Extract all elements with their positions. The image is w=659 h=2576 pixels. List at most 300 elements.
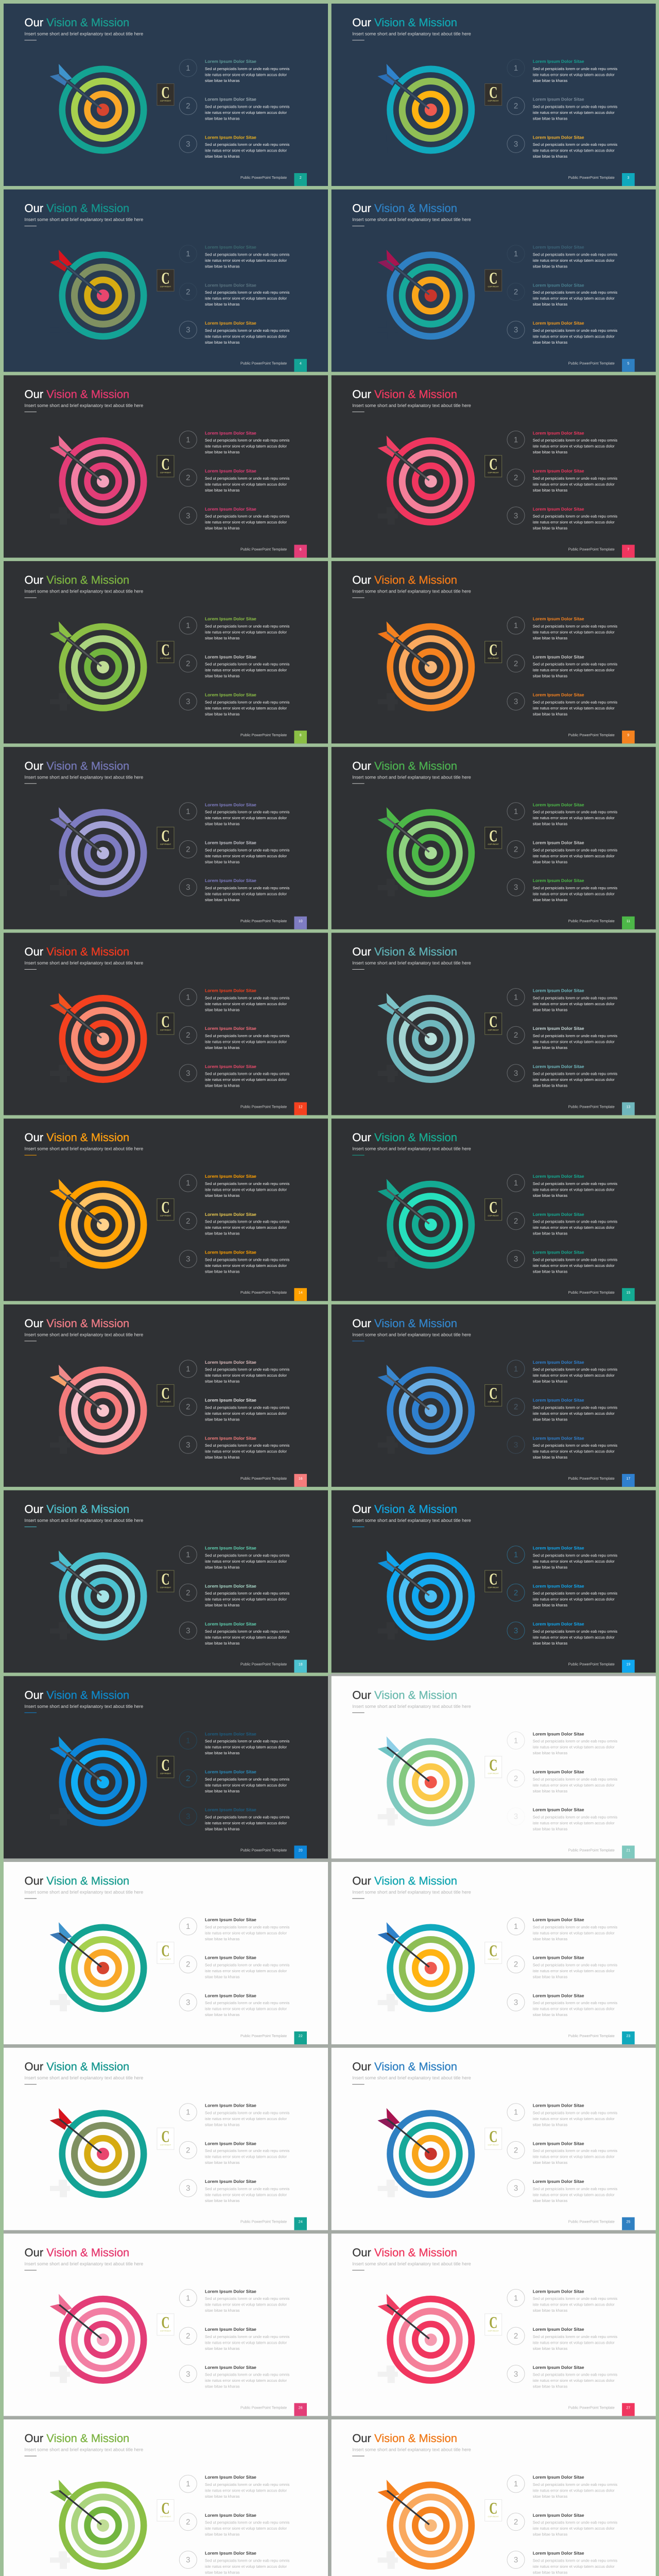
item 2: Lorem Ipsum Dolor Sitae (205, 1398, 256, 1403)
badge: COPYRIGHT (160, 1029, 171, 1031)
badge: C (161, 1755, 170, 1774)
item 1: Sed ut perspiciatis lorem or unde eab repu omnis (533, 2296, 617, 2301)
item 2: iste natus error siore et volup tatem accus dolor (205, 2155, 287, 2159)
item 1: Sed ut perspiciatis lorem or unde eab repu omnis (533, 2482, 617, 2487)
item 1: 1 (186, 807, 190, 816)
title: Our Vision & Mission (25, 2432, 129, 2445)
item 2: Lorem Ipsum Dolor Sitae (533, 468, 584, 473)
item 1: Sed ut perspiciatis lorem or unde eab repu omnis (533, 995, 617, 1000)
item 2: Lorem Ipsum Dolor Sitae (205, 282, 256, 287)
item 3: 3 (514, 883, 518, 892)
slide 12: dark pale teal (332, 933, 656, 1115)
item 2: iste natus error siore et volup tatem accus dolor (205, 296, 287, 301)
subtitle: Insert some short and brief explanatory text about title here (25, 2261, 143, 2266)
item 2: iste natus error siore et volup tatem accus dolor (533, 2155, 615, 2159)
item 1: 1 (186, 2294, 190, 2302)
badge: COPYRIGHT (160, 100, 171, 102)
item 3 (507, 2550, 617, 2574)
target with arrow (50, 1179, 144, 1268)
footer: Public PowerPoint Template (240, 2405, 287, 2410)
badge: C (161, 269, 170, 287)
item 2: Sed ut perspiciatis lorem or unde eab repu omnis (205, 1963, 289, 1967)
footer (568, 359, 635, 372)
item 2 (179, 2141, 290, 2165)
target with arrow (377, 621, 472, 710)
footer: 8 (300, 734, 302, 737)
item 3: Lorem Ipsum Dolor Sitae (205, 692, 256, 697)
title: Our Vision & Mission (352, 1131, 457, 1144)
item 2: sitae bitae ta kharas (205, 1231, 240, 1236)
item 3: Sed ut perspiciatis lorem or unde eab repu omnis (205, 1257, 289, 1262)
item 1 (507, 430, 617, 454)
item 3: Sed ut perspiciatis lorem or unde eab repu omnis (205, 1443, 289, 1448)
item 3: 3 (186, 1255, 190, 1264)
item 2: Lorem Ipsum Dolor Sitae (205, 97, 256, 102)
item 2: iste natus error siore et volup tatem accus dolor (205, 2526, 287, 2531)
footer: Public PowerPoint Template (568, 1290, 615, 1295)
footer: 10 (299, 920, 303, 923)
badge (157, 640, 174, 663)
target with arrow (377, 1922, 472, 2011)
item 3: sitae bitae ta kharas (533, 1269, 567, 1274)
item 2: Sed ut perspiciatis lorem or unde eab repu omnis (533, 848, 617, 852)
item 1: iste natus error siore et volup tatem accus dolor (533, 1373, 615, 1378)
item 3: Lorem Ipsum Dolor Sitae (205, 1435, 256, 1440)
item 2 (179, 840, 290, 864)
item 1: Sed ut perspiciatis lorem or unde eab repu omnis (205, 1553, 289, 1557)
item 1: Lorem Ipsum Dolor Sitae (533, 2289, 584, 2294)
item 1: 1 (186, 1551, 190, 1560)
item 2: sitae bitae ta kharas (533, 1417, 567, 1421)
item 2: Lorem Ipsum Dolor Sitae (205, 2513, 256, 2518)
title: Our Vision & Mission (25, 16, 129, 29)
item 3: sitae bitae ta kharas (533, 1641, 567, 1646)
item 3: iste natus error siore et volup tatem accus dolor (533, 1449, 615, 1454)
item 3: sitae bitae ta kharas (533, 2012, 567, 2017)
item 3: Sed ut perspiciatis lorem or unde eab repu omnis (533, 2001, 617, 2005)
item 2: iste natus error siore et volup tatem accus dolor (205, 668, 287, 672)
footer (240, 1103, 307, 1115)
target with arrow (377, 1551, 472, 1640)
item 3: iste natus error siore et volup tatem accus dolor (205, 1635, 287, 1639)
item 2: Sed ut perspiciatis lorem or unde eab repu omnis (533, 1219, 617, 1224)
item 2: 2 (186, 102, 190, 111)
badge: C (489, 1384, 497, 1402)
subtitle: Insert some short and brief explanatory text about title here (352, 2261, 471, 2266)
item 1: Sed ut perspiciatis lorem or unde eab repu omnis (205, 1181, 289, 1186)
title: Our Vision & Mission (352, 387, 457, 400)
item 1: Lorem Ipsum Dolor Sitae (205, 616, 256, 621)
item 1: iste natus error siore et volup tatem accus dolor (533, 72, 615, 77)
slide 28: light orange (332, 2419, 656, 2576)
footer: 11 (627, 920, 630, 923)
item 1: 1 (514, 435, 518, 444)
badge: C (489, 826, 497, 845)
item 1: sitae bitae ta kharas (205, 636, 240, 640)
item 3: iste natus error siore et volup tatem accus dolor (205, 148, 287, 153)
item 3: 3 (186, 140, 190, 148)
badge: C (161, 826, 170, 845)
footer (568, 1845, 635, 1858)
item 3: Lorem Ipsum Dolor Sitae (205, 878, 256, 883)
item 3: Lorem Ipsum Dolor Sitae (205, 1993, 256, 1998)
item 3: Sed ut perspiciatis lorem or unde eab repu omnis (205, 2001, 289, 2005)
item 2: iste natus error siore et volup tatem accus dolor (533, 668, 615, 672)
item 2: Lorem Ipsum Dolor Sitae (205, 1583, 256, 1588)
badge: C (489, 1198, 497, 1216)
item 3: Lorem Ipsum Dolor Sitae (533, 506, 584, 512)
target with arrow (50, 2108, 144, 2197)
item 3: sitae bitae ta kharas (205, 2198, 240, 2203)
item 1: sitae bitae ta kharas (533, 636, 567, 640)
badge (157, 269, 174, 291)
target with arrow (50, 250, 144, 339)
item 2: iste natus error siore et volup tatem accus dolor (533, 296, 615, 301)
item 2 (507, 1398, 617, 1421)
item 2 (179, 1955, 290, 1979)
item 1: Lorem Ipsum Dolor Sitae (533, 616, 584, 621)
item 1: iste natus error siore et volup tatem accus dolor (533, 1187, 615, 1192)
item 2: Sed ut perspiciatis lorem or unde eab repu omnis (533, 104, 617, 109)
footer: 17 (627, 1477, 630, 1481)
badge: COPYRIGHT (488, 2144, 499, 2146)
item 2: 2 (514, 287, 518, 296)
item 2: sitae bitae ta kharas (533, 674, 567, 679)
item 1 (507, 1360, 617, 1384)
badge: COPYRIGHT (488, 286, 499, 288)
item 3: Sed ut perspiciatis lorem or unde eab repu omnis (533, 886, 617, 890)
item 2: iste natus error siore et volup tatem accus dolor (533, 1783, 615, 1787)
item 1: iste natus error siore et volup tatem accus dolor (533, 444, 615, 449)
slide 15: dark light pink (4, 1304, 328, 1487)
item 2: 2 (186, 659, 190, 668)
subtitle: Insert some short and brief explanatory text about title here (25, 1890, 143, 1895)
item 3: 3 (186, 2184, 190, 2193)
item 3: sitae bitae ta kharas (205, 1455, 240, 1460)
item 2 (507, 1026, 617, 1050)
badge: C (161, 640, 170, 659)
item 3 (507, 1250, 617, 1274)
item 1: Sed ut perspiciatis lorem or unde eab repu omnis (533, 2110, 617, 2115)
item 1: 1 (514, 1179, 518, 1188)
item 1 (179, 2103, 290, 2127)
footer (568, 1288, 635, 1301)
item 3: Lorem Ipsum Dolor Sitae (533, 2551, 584, 2556)
item 1: 1 (514, 1922, 518, 1931)
item 1: 1 (514, 1736, 518, 1745)
item 1: sitae bitae ta kharas (533, 450, 567, 454)
target with arrow (50, 1922, 144, 2011)
footer (568, 2031, 635, 2044)
badge (485, 83, 502, 105)
item 2: iste natus error siore et volup tatem accus dolor (533, 2526, 615, 2531)
item 2 (179, 1583, 290, 1607)
item 2: 2 (514, 102, 518, 111)
item 1: Lorem Ipsum Dolor Sitae (205, 1174, 256, 1179)
item 2: 2 (186, 845, 190, 854)
item 2 (179, 282, 290, 307)
title rule (352, 783, 365, 784)
item 3: Lorem Ipsum Dolor Sitae (205, 320, 256, 326)
item 1: 1 (514, 2108, 518, 2117)
item 1: Sed ut perspiciatis lorem or unde eab repu omnis (533, 252, 617, 257)
item 2: Lorem Ipsum Dolor Sitae (205, 1212, 256, 1217)
item 1: sitae bitae ta kharas (533, 1937, 567, 1941)
badge: C (489, 640, 497, 659)
item 2: Lorem Ipsum Dolor Sitae (533, 1398, 584, 1403)
footer: 26 (299, 2406, 303, 2410)
footer (240, 545, 307, 557)
item 2: sitae bitae ta kharas (533, 1603, 567, 1607)
item 3: iste natus error siore et volup tatem accus dolor (533, 1635, 615, 1639)
footer: 18 (299, 1663, 303, 1667)
slide 4: navy blue magenta arrow (332, 190, 656, 372)
item 1: Lorem Ipsum Dolor Sitae (205, 2103, 256, 2108)
item 3: Sed ut perspiciatis lorem or unde eab repu omnis (205, 2187, 289, 2191)
item 2: Lorem Ipsum Dolor Sitae (205, 840, 256, 845)
item 3: Sed ut perspiciatis lorem or unde eab repu omnis (205, 700, 289, 704)
item 2: iste natus error siore et volup tatem accus dolor (205, 854, 287, 858)
item 3: Sed ut perspiciatis lorem or unde eab repu omnis (205, 514, 289, 519)
item 3: iste natus error siore et volup tatem accus dolor (205, 334, 287, 338)
footer: Public PowerPoint Template (568, 361, 615, 366)
item 1: iste natus error siore et volup tatem accus dolor (205, 630, 287, 634)
item 2: 2 (186, 473, 190, 482)
badge: C (489, 1755, 497, 1774)
item 3: sitae bitae ta kharas (533, 154, 567, 159)
item 3: 3 (514, 1069, 518, 1078)
item 2: iste natus error siore et volup tatem accus dolor (533, 482, 615, 486)
slide 23: light teal red arrow (4, 2048, 328, 2230)
slide 27: light green (4, 2419, 328, 2576)
footer: Public PowerPoint Template (568, 2219, 615, 2224)
item 2: 2 (514, 1774, 518, 1783)
item 1: Sed ut perspiciatis lorem or unde eab repu omnis (533, 66, 617, 71)
slide 16: dark blue (332, 1304, 656, 1487)
item 2: 2 (514, 1588, 518, 1597)
item 2: 2 (186, 1403, 190, 1412)
subtitle: Insert some short and brief explanatory text about title here (25, 1146, 143, 1151)
item 1: sitae bitae ta kharas (533, 2122, 567, 2127)
slide 14: dark green teal (332, 1118, 656, 1301)
item 1: 1 (186, 2480, 190, 2488)
item 1: 1 (186, 993, 190, 1002)
item 2 (507, 282, 617, 307)
subtitle: Insert some short and brief explanatory text about title here (352, 1704, 471, 1709)
badge: COPYRIGHT (160, 1401, 171, 1403)
title: Our Vision & Mission (25, 759, 129, 772)
item 2: Lorem Ipsum Dolor Sitae (205, 1026, 256, 1031)
item 3 (179, 320, 290, 345)
item 3 (507, 692, 617, 716)
badge (157, 1941, 174, 1964)
footer: 14 (299, 1291, 303, 1295)
subtitle: Insert some short and brief explanatory text about title here (352, 1890, 471, 1895)
badge: C (161, 454, 170, 473)
item 3 (179, 1250, 290, 1274)
target with arrow (377, 807, 472, 896)
item 1: iste natus error siore et volup tatem accus dolor (205, 1745, 287, 1750)
title: Our Vision & Mission (25, 1317, 129, 1330)
footer: 7 (627, 548, 629, 551)
title rule (25, 969, 37, 970)
item 1: Sed ut perspiciatis lorem or unde eab repu omnis (533, 1181, 617, 1186)
item 2: iste natus error siore et volup tatem accus dolor (205, 1040, 287, 1044)
item 3: iste natus error siore et volup tatem accus dolor (205, 2564, 287, 2569)
badge: COPYRIGHT (488, 1587, 499, 1589)
item 1: iste natus error siore et volup tatem accus dolor (205, 258, 287, 263)
item 3: 3 (514, 697, 518, 706)
item 3: Lorem Ipsum Dolor Sitae (533, 692, 584, 697)
footer: 15 (627, 1291, 630, 1295)
title: Our Vision & Mission (25, 573, 129, 586)
item 2: iste natus error siore et volup tatem accus dolor (205, 1597, 287, 1602)
badge: COPYRIGHT (488, 657, 499, 659)
item 2: Sed ut perspiciatis lorem or unde eab repu omnis (205, 476, 289, 481)
item 2: Sed ut perspiciatis lorem or unde eab repu omnis (205, 1033, 289, 1038)
item 1: iste natus error siore et volup tatem accus dolor (533, 816, 615, 820)
item 1: Sed ut perspiciatis lorem or unde eab repu omnis (533, 1553, 617, 1557)
item 1: iste natus error siore et volup tatem accus dolor (533, 1559, 615, 1564)
item 3: sitae bitae ta kharas (205, 897, 240, 902)
item 2: sitae bitae ta kharas (205, 859, 240, 864)
badge (157, 454, 174, 477)
footer: Public PowerPoint Template (240, 361, 287, 366)
item 2: 2 (186, 2518, 190, 2527)
item 2: sitae bitae ta kharas (205, 2160, 240, 2165)
item 1: iste natus error siore et volup tatem accus dolor (533, 1930, 615, 1935)
item 1 (179, 59, 290, 83)
footer: 23 (627, 2035, 630, 2038)
footer (240, 173, 307, 186)
item 1 (179, 1174, 290, 1198)
badge: COPYRIGHT (488, 2330, 499, 2332)
subtitle: Insert some short and brief explanatory text about title here (352, 2447, 471, 2452)
title rule (352, 1155, 365, 1156)
slide 1: navy teal (4, 4, 328, 186)
item 2: 2 (514, 1217, 518, 1226)
item 1: sitae bitae ta kharas (533, 1565, 567, 1569)
badge: COPYRIGHT (160, 2330, 171, 2332)
item 2: Lorem Ipsum Dolor Sitae (533, 97, 584, 102)
item 2: Lorem Ipsum Dolor Sitae (205, 468, 256, 473)
item 1: iste natus error siore et volup tatem accus dolor (205, 72, 287, 77)
item 2: Sed ut perspiciatis lorem or unde eab repu omnis (533, 2334, 617, 2339)
item 1: sitae bitae ta kharas (205, 2308, 240, 2313)
footer: 24 (299, 2221, 303, 2224)
item 2: sitae bitae ta kharas (205, 2532, 240, 2537)
item 2: iste natus error siore et volup tatem accus dolor (533, 110, 615, 115)
item 2: iste natus error siore et volup tatem accus dolor (533, 1040, 615, 1044)
subtitle: Insert some short and brief explanatory text about title here (352, 774, 471, 779)
item 1: Lorem Ipsum Dolor Sitae (533, 245, 584, 250)
item 1 (179, 430, 290, 454)
item 2 (179, 2327, 290, 2351)
item 3: 3 (514, 512, 518, 520)
item 2: sitae bitae ta kharas (205, 674, 240, 679)
item 2: Lorem Ipsum Dolor Sitae (533, 2327, 584, 2332)
item 1: Sed ut perspiciatis lorem or unde eab repu omnis (205, 1367, 289, 1372)
item 3: iste natus error siore et volup tatem accus dolor (205, 2378, 287, 2383)
item 2: Lorem Ipsum Dolor Sitae (533, 1026, 584, 1031)
badge: C (489, 1941, 497, 1960)
item 3: 3 (514, 140, 518, 148)
item 2: Lorem Ipsum Dolor Sitae (533, 282, 584, 287)
target with arrow (50, 807, 144, 896)
subtitle: Insert some short and brief explanatory text about title here (352, 1518, 471, 1523)
item 2: iste natus error siore et volup tatem accus dolor (205, 1969, 287, 1973)
subtitle: Insert some short and brief explanatory text about title here (25, 774, 143, 779)
footer: 19 (627, 1663, 630, 1667)
item 1: Lorem Ipsum Dolor Sitae (533, 1546, 584, 1551)
item 2: sitae bitae ta kharas (205, 1417, 240, 1421)
item 3: sitae bitae ta kharas (533, 711, 567, 716)
item 2: Sed ut perspiciatis lorem or unde eab repu omnis (205, 1591, 289, 1596)
item 3: Sed ut perspiciatis lorem or unde eab repu omnis (205, 1815, 289, 1820)
item 2: Lorem Ipsum Dolor Sitae (533, 654, 584, 659)
item 2: sitae bitae ta kharas (205, 1603, 240, 1607)
badge (157, 2313, 174, 2335)
footer: Public PowerPoint Template (240, 1662, 287, 1667)
item 3 (507, 2179, 617, 2203)
item 2: sitae bitae ta kharas (205, 302, 240, 307)
badge (485, 2499, 502, 2521)
item 3: iste natus error siore et volup tatem accus dolor (533, 520, 615, 524)
title: Our Vision & Mission (352, 1317, 457, 1330)
badge: COPYRIGHT (160, 1215, 171, 1217)
item 3: Lorem Ipsum Dolor Sitae (533, 2365, 584, 2370)
item 1: Lorem Ipsum Dolor Sitae (533, 59, 584, 64)
footer (240, 2031, 307, 2044)
item 3: Sed ut perspiciatis lorem or unde eab repu omnis (533, 2372, 617, 2377)
item 1: 1 (514, 993, 518, 1002)
item 3: sitae bitae ta kharas (205, 2012, 240, 2017)
item 1 (507, 616, 617, 640)
item 1: Lorem Ipsum Dolor Sitae (205, 2475, 256, 2480)
item 2 (179, 654, 290, 679)
target with arrow (377, 250, 472, 339)
footer (240, 2403, 307, 2416)
item 3: Sed ut perspiciatis lorem or unde eab repu omnis (533, 514, 617, 519)
badge (485, 826, 502, 849)
item 1 (507, 2475, 617, 2499)
item 3: 3 (514, 2556, 518, 2565)
title rule (352, 1898, 365, 1899)
footer: Public PowerPoint Template (240, 1848, 287, 1852)
footer (240, 1660, 307, 1673)
item 3: Lorem Ipsum Dolor Sitae (533, 878, 584, 883)
item 2 (507, 1583, 617, 1607)
badge: COPYRIGHT (488, 1772, 499, 1774)
target with arrow (377, 435, 472, 524)
item 2: Sed ut perspiciatis lorem or unde eab repu omnis (205, 2334, 289, 2339)
title rule (25, 1155, 37, 1156)
item 2: 2 (186, 287, 190, 296)
item 1: Lorem Ipsum Dolor Sitae (205, 1917, 256, 1922)
item 1: Sed ut perspiciatis lorem or unde eab repu omnis (205, 438, 289, 443)
item 2: iste natus error siore et volup tatem accus dolor (533, 854, 615, 858)
item 1: sitae bitae ta kharas (205, 1751, 240, 1755)
footer: Public PowerPoint Template (240, 175, 287, 180)
target with arrow (377, 1365, 472, 1454)
item 3 (179, 1621, 290, 1646)
item 2: 2 (514, 2518, 518, 2527)
title rule (25, 783, 37, 784)
item 3: Lorem Ipsum Dolor Sitae (533, 1064, 584, 1069)
badge: C (489, 269, 497, 287)
item 3 (179, 2550, 290, 2574)
item 3: iste natus error siore et volup tatem accus dolor (533, 1821, 615, 1825)
